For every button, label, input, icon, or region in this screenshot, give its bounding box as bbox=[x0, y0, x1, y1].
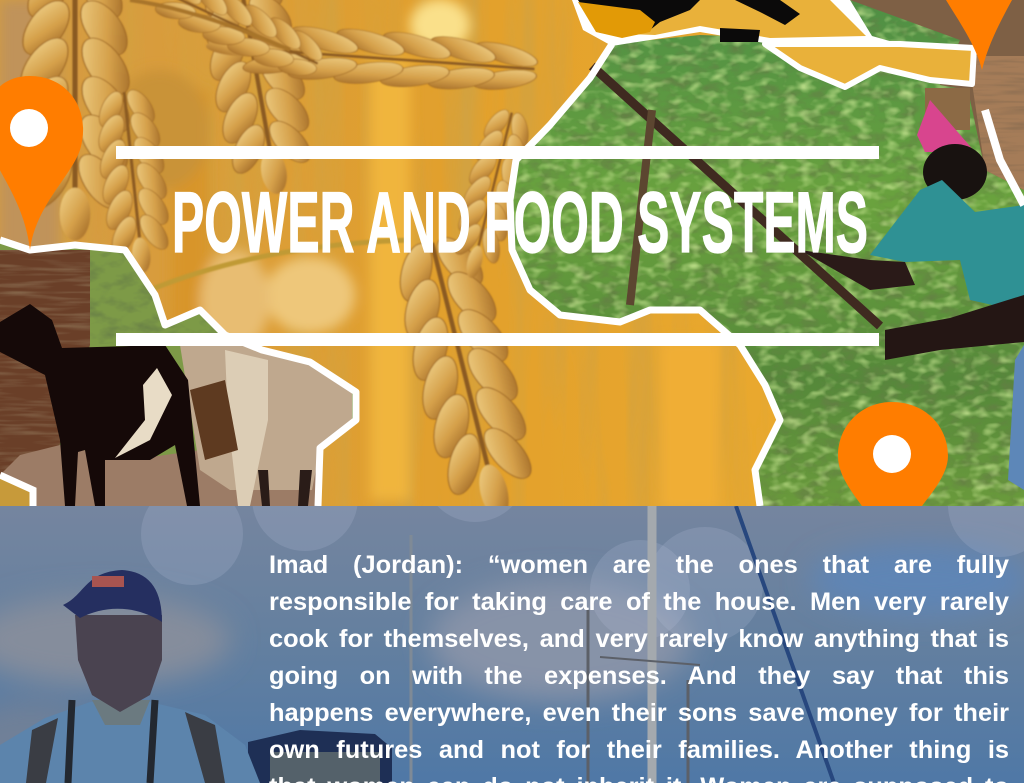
photo: farm field, right bbox=[510, 0, 1024, 506]
quote panel background photo bbox=[0, 506, 1024, 783]
wheat field background bbox=[0, 0, 1024, 532]
photo: goats and tree, left bbox=[0, 240, 356, 506]
sky bbox=[0, 506, 1024, 783]
rule: top bbox=[116, 146, 879, 159]
man portrait bbox=[0, 570, 260, 783]
black and gold map region, top bbox=[572, 0, 900, 46]
boat bbox=[248, 730, 392, 783]
translucent circles bbox=[141, 418, 1024, 643]
quote text: own futures and not for their families. Another thing is bbox=[269, 736, 1009, 764]
map pin: bottom right bbox=[838, 402, 948, 506]
clouds bbox=[0, 545, 1024, 780]
wheat corner bbox=[0, 478, 32, 506]
quote text: happens everywhere, even their sons save money for their bbox=[269, 699, 1009, 727]
bricks and building bbox=[850, 0, 1024, 190]
ground bbox=[0, 445, 320, 506]
quote text: going on with the expenses. And they say that this bbox=[269, 662, 1009, 690]
quote text: responsible for taking care of the house. Men very rarely bbox=[269, 588, 1009, 616]
map pin: top right bbox=[946, 0, 1012, 70]
black goat bbox=[0, 304, 200, 506]
tree trunk bbox=[0, 250, 90, 475]
gold map island bbox=[765, 44, 974, 87]
white goats bbox=[180, 345, 352, 490]
rule: bottom bbox=[116, 333, 879, 346]
farmer bbox=[800, 88, 1024, 490]
quote text bbox=[269, 551, 1009, 783]
quote text: Imad (Jordan): “women are the ones that are fully bbox=[269, 551, 1009, 579]
sailboat masts bbox=[411, 506, 834, 783]
map pin: left bbox=[0, 76, 83, 250]
quote text: cook for themselves, and very rarely know anything that is bbox=[269, 625, 1009, 653]
wheat ears bbox=[11, 0, 555, 532]
pole bbox=[592, 66, 880, 326]
hero photo collage panel bbox=[0, 0, 1024, 506]
